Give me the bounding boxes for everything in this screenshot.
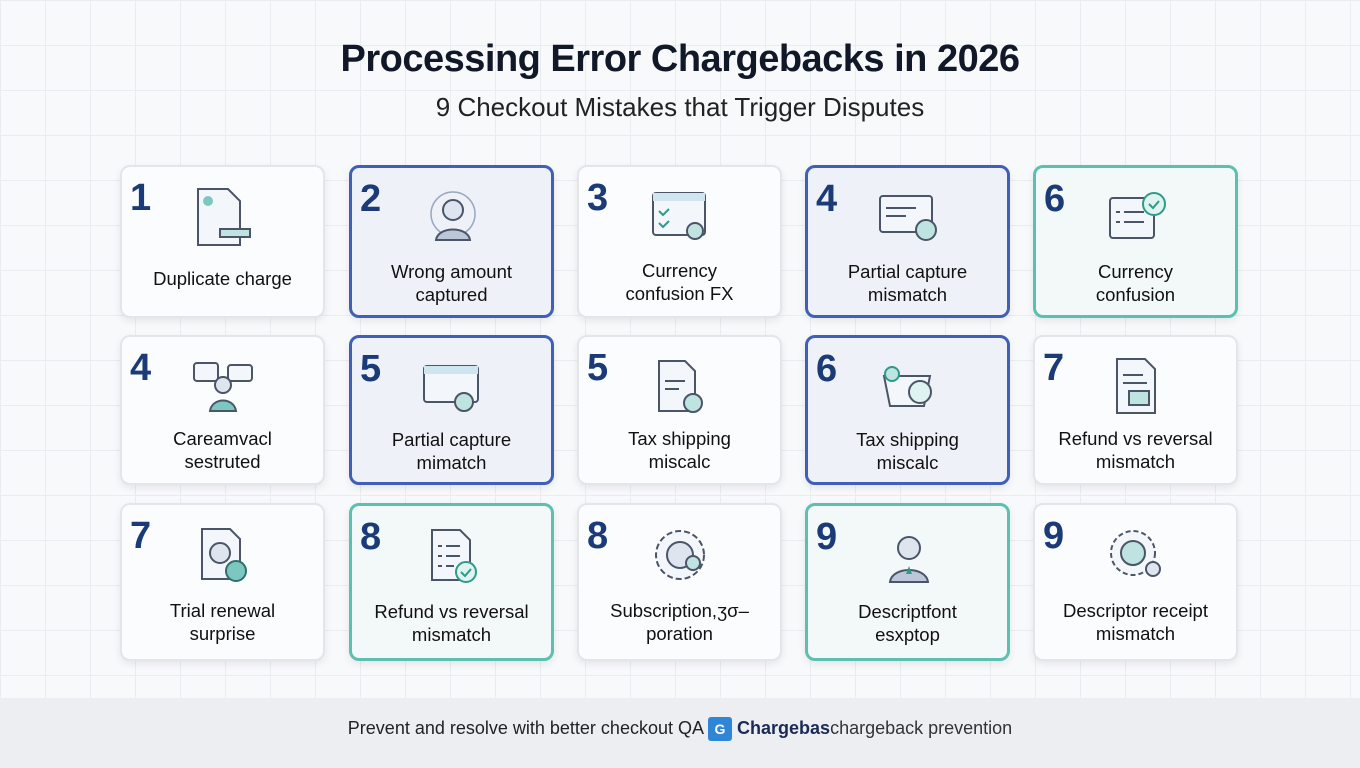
card 5 row2 b: Tax shipping [628,428,731,449]
card 3: confusion FX [626,283,733,304]
card 5 row2: 5 [360,348,381,390]
card 4 row2: 4 [130,347,151,389]
card 8 row3 b: Subscription,ʒσ– [610,600,749,621]
card 7 row3: 7 [130,515,151,557]
card 6 row2: miscalc [877,452,938,473]
card 2 [349,165,554,318]
card 7 row2: Refund vs reversal [1058,428,1213,449]
card 1: Duplicate charge [153,268,292,289]
card 3: Currency [642,260,717,281]
card 7 row3 [120,503,325,661]
card 7 row2 [1033,335,1238,485]
card 8 row3: mismatch [412,624,491,645]
footer: Prevent and resolve with better checkout QA Chargebaschargeback prevention [348,718,1012,738]
card 4 [805,165,1010,318]
card 9 row3 [805,503,1010,661]
card 3: 3 [587,177,608,219]
card 8 row3 [349,503,554,661]
card 7 row2: mismatch [1096,451,1175,472]
card 5 row2 b: miscalc [649,451,710,472]
card 6 row2: 6 [816,348,837,390]
title: Processing Error Chargebacks in 2026 [340,38,1020,80]
card 9 row3 b: mismatch [1096,623,1175,644]
card 2: Wrong amount [391,261,512,282]
card 6 top: confusion [1096,284,1175,305]
card 5 row2 [349,335,554,485]
card 9 row3 b: 9 [1043,515,1064,557]
card 4 row2: Careamvacl [173,428,272,449]
footer: G [715,721,725,737]
card 8 row3 b: poration [646,623,713,644]
card 5 row2 b: 5 [587,347,608,389]
card 9 row3 b [1033,503,1238,661]
card 9 row3 b: Descriptor receipt [1063,600,1208,621]
card 7 row3: surprise [190,623,255,644]
card 8 row3 b: 8 [587,515,608,557]
card 9 row3: esxptop [875,624,940,645]
card 6 top [1033,165,1238,318]
card 7 row2: 7 [1043,347,1064,389]
card 1: 1 [130,177,151,219]
card 6 top: Currency [1098,261,1173,282]
card 9 row3: 9 [816,516,837,558]
card 6 row2 [805,335,1010,485]
card 4: 4 [816,178,837,220]
footer [0,698,1360,768]
card 7 row3: Trial renewal [170,600,275,621]
card 4 row2 [120,335,325,485]
card 9 row3: Descriptfont [858,601,957,622]
card 8 row3: 8 [360,516,381,558]
card 8 row3 b [577,503,782,661]
card 5 row2: Partial capture [392,429,511,450]
card 4: Partial capture [848,261,967,282]
card 4: mismatch [868,284,947,305]
card 6 row2: Tax shipping [856,429,959,450]
card 4 row2: sestruted [184,451,261,472]
card 2: captured [416,284,488,305]
card 8 row3: Refund vs reversal [374,601,529,622]
card 6 top: 6 [1044,178,1065,220]
card 5 row2 b [577,335,782,485]
card 5 row2: mimatch [417,452,486,473]
card 1 [120,165,325,318]
card 3 [577,165,782,318]
subtitle: 9 Checkout Mistakes that Trigger Disputes [436,92,924,122]
card 2: 2 [360,178,381,220]
